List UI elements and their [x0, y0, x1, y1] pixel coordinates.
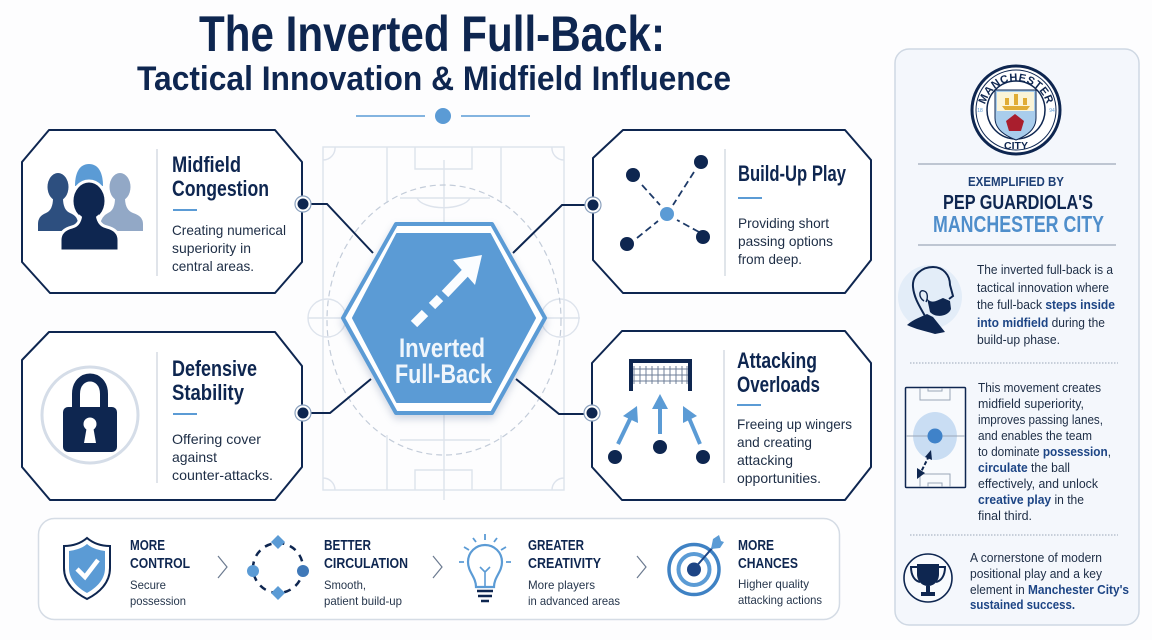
pitch background — [308, 147, 580, 500]
text block: definition: build-up phase. — [977, 332, 1060, 347]
panel: midfield congestion — [22, 130, 302, 293]
benefit: greater creativity: CREATIVITY — [528, 556, 601, 572]
panel: attacking overloads — [592, 331, 871, 500]
heading — [172, 356, 257, 405]
benefit: more control — [64, 538, 190, 608]
benefit: more control: CONTROL — [130, 556, 190, 572]
arrow — [218, 556, 227, 578]
description: Creating numerical — [172, 222, 286, 238]
benefit: more control: Secure — [130, 578, 166, 592]
icon: club crest: CITY — [1004, 140, 1028, 152]
icon: dashed arrow — [414, 255, 482, 324]
benefit: better circulation: patient build-up — [324, 594, 402, 608]
description: Providing short — [738, 215, 829, 231]
text block: definition: tactical innovation where — [977, 280, 1109, 295]
description: superiority in — [172, 240, 251, 256]
description: and creating — [737, 434, 812, 450]
connector: midfield congestion — [303, 204, 373, 253]
icon: mini pitch diagram — [906, 388, 966, 488]
heading: Midfield — [172, 152, 241, 177]
description — [737, 416, 852, 486]
description — [172, 431, 273, 483]
text block: definition: into midfield during the — [977, 315, 1105, 330]
connector node: build-up play — [585, 197, 601, 213]
benefit: more control: MORE — [130, 538, 165, 554]
text block: impact: midfield superiority, — [978, 396, 1084, 411]
heading — [172, 152, 269, 201]
description: Offering cover — [172, 431, 261, 447]
description: attacking — [737, 452, 793, 468]
text block: definition: the full-back steps inside — [977, 297, 1115, 312]
description: from deep. — [738, 251, 802, 267]
text block: legacy: positional play and a key — [970, 566, 1102, 581]
connector node: defensive stability — [295, 405, 311, 421]
panel: benefits strip — [38, 518, 840, 620]
text block: impact: creative play in the — [978, 492, 1084, 507]
heading: Attacking — [737, 348, 817, 373]
icon: club crest — [970, 64, 1062, 156]
description — [738, 215, 833, 267]
panel: defensive stability — [22, 332, 302, 500]
title — [137, 6, 731, 98]
title: Tactical Innovation & Midfield Influence — [137, 60, 731, 98]
text block: legacy: A cornerstone of modern — [970, 550, 1102, 565]
heading: Defensive — [172, 356, 257, 381]
benefit: more chances: attacking actions — [738, 593, 822, 607]
icon: passing network — [620, 155, 710, 251]
benefit: more chances — [669, 535, 822, 607]
hexagon label: Full-Back — [395, 359, 493, 389]
icon: Guardiola portrait — [898, 265, 962, 334]
connector node: attacking overloads — [584, 405, 600, 421]
text block: legacy: sustained success. — [970, 597, 1075, 612]
text block: legacy — [970, 550, 1129, 612]
text block: impact: final third. — [978, 508, 1032, 523]
panel: build-up play — [593, 130, 871, 293]
benefit: more control: possession — [130, 594, 186, 608]
description: central areas. — [172, 258, 254, 274]
benefit: more chances: MORE — [738, 538, 774, 554]
benefit: better circulation: CIRCULATION — [324, 556, 408, 572]
icon: circulation loop — [247, 535, 309, 600]
panel: Manchester City sidebar — [894, 48, 1140, 626]
connector: build-up play — [513, 205, 593, 253]
benefit: better circulation: Smooth, — [324, 578, 366, 592]
heading: Build-Up Play — [738, 161, 847, 186]
icon: light bulb — [459, 534, 511, 601]
heading — [737, 348, 820, 397]
benefit: greater creativity — [459, 534, 620, 608]
benefit: more chances: Higher quality — [738, 577, 809, 591]
text block: impact: and enables the team — [978, 428, 1092, 443]
text block: definition — [977, 262, 1115, 347]
sidebar heading: PEP GUARDIOLA'S — [943, 192, 1093, 214]
icon: goal and attacking arrows — [608, 361, 710, 464]
description: opportunities. — [737, 470, 821, 486]
heading: Stability — [172, 380, 245, 405]
description: Freeing up wingers — [737, 416, 852, 432]
description: counter-attacks. — [172, 467, 273, 483]
text block: legacy: element in Manchester City's — [970, 582, 1129, 597]
heading: Overloads — [737, 372, 820, 397]
sidebar heading: MANCHESTER CITY — [933, 211, 1104, 237]
icon: club crest: 94 — [1049, 108, 1055, 114]
arrow — [433, 556, 442, 578]
benefit: greater creativity: in advanced areas — [528, 594, 620, 608]
connector: defensive stability — [303, 379, 371, 413]
icon: club crest: MANCHESTER — [978, 73, 1053, 104]
title: The Inverted Full-Back: — [199, 6, 665, 62]
arrow — [637, 556, 646, 578]
heading: Congestion — [172, 176, 269, 201]
hexagon label: Inverted — [399, 333, 485, 363]
icon: target with dart — [669, 535, 724, 594]
text block: impact: to dominate possession, — [978, 444, 1111, 459]
title ornament — [356, 108, 530, 124]
description: passing options — [738, 233, 833, 249]
benefit: better circulation — [247, 535, 408, 608]
text block: impact: effectively, and unlock — [978, 476, 1098, 491]
text block: impact: This movement creates — [978, 380, 1101, 395]
description — [172, 222, 286, 274]
benefit: more chances: CHANCES — [738, 556, 798, 572]
benefit: better circulation: BETTER — [324, 538, 371, 554]
icon: shield with check — [64, 538, 110, 599]
text block: impact: improves passing lanes, — [978, 412, 1103, 427]
description: against — [172, 449, 217, 465]
benefit: greater creativity: GREATER — [528, 538, 584, 554]
connector: attacking overloads — [516, 379, 592, 414]
sidebar heading: EXEMPLIFIED BY — [968, 174, 1064, 189]
text block: definition: The inverted full-back is a — [977, 262, 1114, 277]
hexagon label — [395, 333, 493, 389]
icon: club crest: 18 — [977, 108, 983, 114]
benefit: greater creativity: More players — [528, 578, 595, 592]
connector node: midfield congestion — [295, 196, 311, 212]
central hexagon — [343, 224, 545, 413]
sidebar heading — [933, 174, 1104, 237]
icon: group of players — [38, 164, 143, 251]
icon: padlock — [42, 367, 138, 463]
icon: trophy — [904, 554, 952, 602]
text block: impact — [978, 380, 1111, 523]
text block: impact: circulate the ball — [978, 460, 1070, 475]
